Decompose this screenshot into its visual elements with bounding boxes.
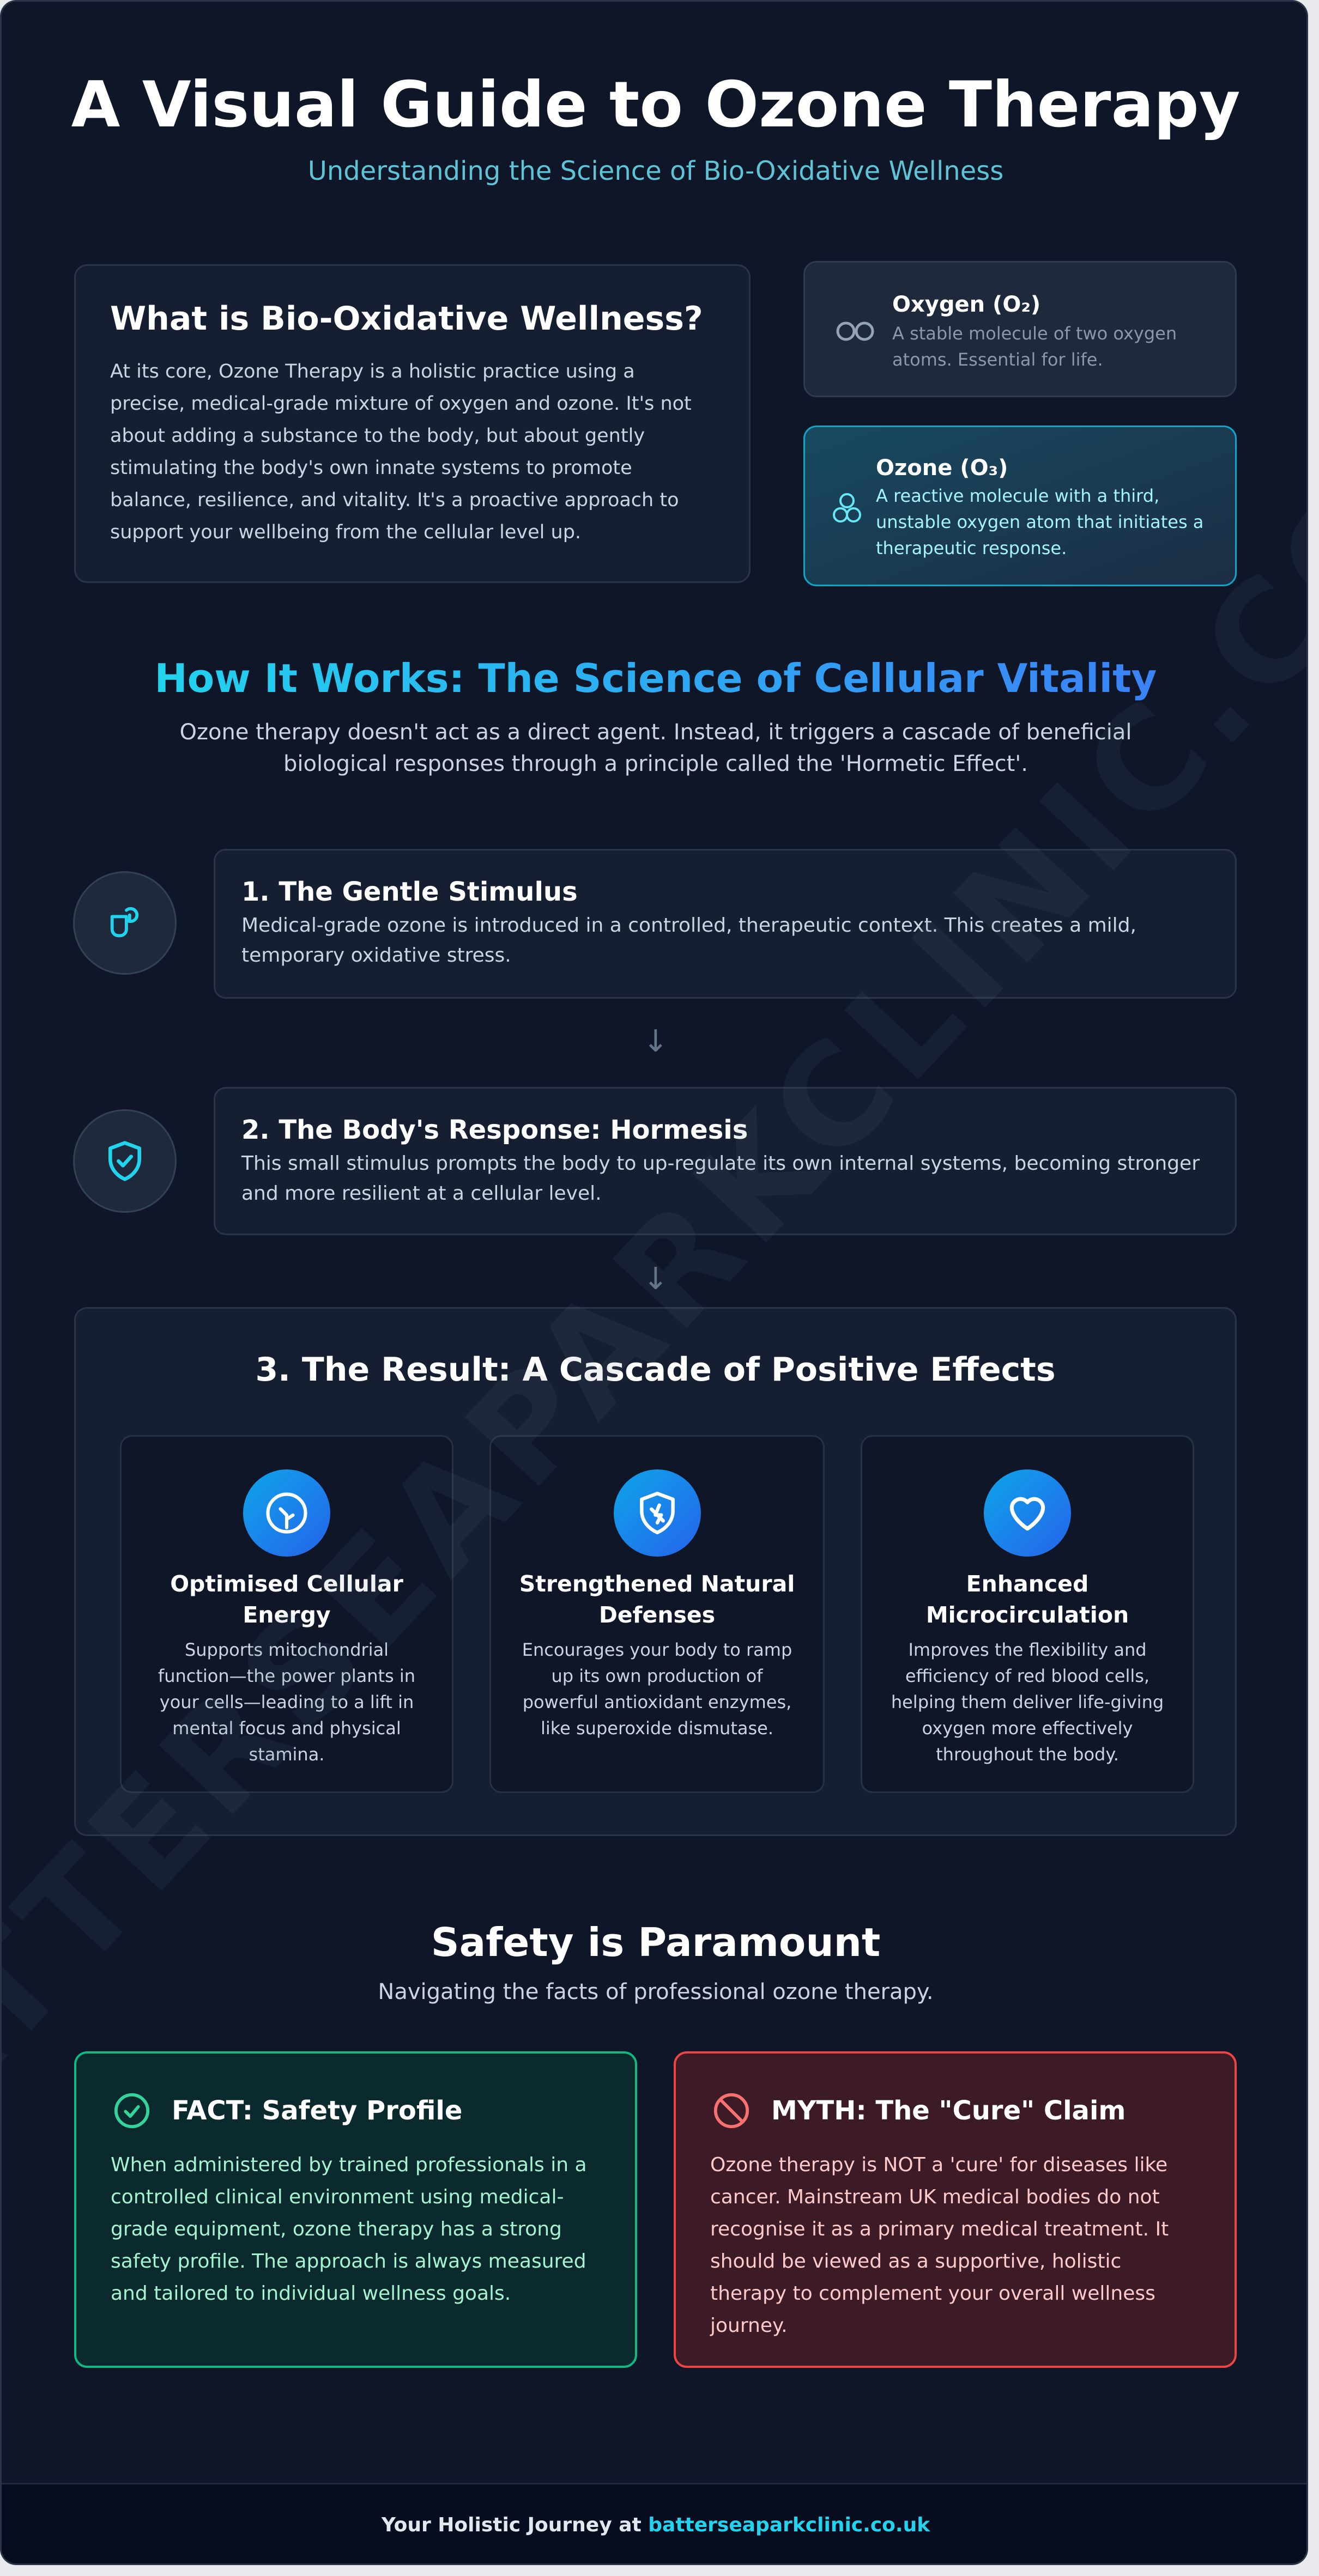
card: cellular energy: Supports mitochondrial function—the power plants in your cells—leading to a lift in mental focus and physical stamina. bbox=[158, 1639, 415, 1765]
icon: shield bbox=[614, 1469, 701, 1557]
myth title: MYTH: The "Cure" Claim bbox=[771, 2095, 1126, 2126]
panel heading: What is Bio-Oxidative Wellness? bbox=[110, 300, 703, 338]
icon: no bbox=[714, 2093, 749, 2128]
step 2 card bbox=[214, 1087, 1237, 1235]
icon: ozone molecule bbox=[833, 493, 861, 523]
heading: safety: Safety is Paramount bbox=[431, 1919, 880, 1965]
card: natural defenses: Encourages your body to ramp up its own production of powerful antioxidant enzymes, like superoxide dismutase. bbox=[522, 1639, 792, 1739]
panel: what is bio-oxidative wellness bbox=[74, 264, 751, 583]
step 2 card: This small stimulus prompts the body to up-regulate its own internal systems, becoming stronger and more resilient at a cellular level. bbox=[241, 1152, 1200, 1205]
heading: how it works: How It Works: The Science of Cellular Vitality bbox=[155, 655, 1157, 701]
title: A Visual Guide to Ozone Therapy bbox=[71, 68, 1240, 142]
how it works intro: Ozone therapy doesn't act as a direct agent. Instead, it triggers a cascade of beneficial biological responses through a principle called the 'Hormetic Effect'. bbox=[179, 720, 1132, 776]
card: cellular energy: Optimised Cellular Energy bbox=[170, 1571, 403, 1628]
panel body text: At its core, Ozone Therapy is a holistic practice using a precise, medical-grade mixture of oxygen and ozone. It's not about adding a substance to the body, but about gently stimulating the body's own innate systems to promote balance, resilience, and vitality. It's a proactive approach to support your wellbeing from the cellular level up. bbox=[110, 361, 692, 543]
oxygen description: A stable molecule of two oxygen atoms. Essential for life. bbox=[892, 323, 1177, 370]
card: natural defenses: Strengthened Natural Defenses bbox=[519, 1571, 795, 1628]
oxygen title: Oxygen (O₂) bbox=[892, 292, 1040, 317]
arrow: step 2 to 3: ↓ bbox=[643, 1261, 668, 1297]
panel: step 3 result bbox=[74, 1307, 1237, 1836]
panel: fact bbox=[74, 2051, 637, 2368]
icon: check bbox=[114, 2093, 149, 2128]
card: cellular energy bbox=[120, 1435, 453, 1793]
subtitle: Understanding the Science of Bio-Oxidative Wellness bbox=[308, 156, 1003, 186]
ozone title: Ozone (O₃) bbox=[876, 455, 1008, 481]
panel: myth bbox=[674, 2051, 1237, 2368]
fact body: When administered by trained professionals in a controlled clinical environment using medical-grade equipment, ozone therapy has a strong safety profile. The approach is always measured and tailored to individual wellness goals. bbox=[111, 2154, 587, 2305]
card: microcirculation: Improves the flexibility and efficiency of red blood cells, helping them deliver life-giving oxygen more effectively throughout the body. bbox=[891, 1639, 1164, 1765]
step 2 card: 2. The Body's Response: Hormesis bbox=[241, 1115, 748, 1145]
card: microcirculation: Enhanced Microcirculation bbox=[926, 1571, 1129, 1628]
card: oxygen bbox=[803, 261, 1237, 397]
ozone description: A reactive molecule with a third, unstable oxygen atom that initiates a therapeutic response. bbox=[876, 485, 1203, 558]
footer: Your Holistic Journey at batterseaparkclinic.co.uk bbox=[382, 2514, 930, 2536]
footer bbox=[2, 2483, 1310, 2570]
result heading: 3. The Result: A Cascade of Positive Effects bbox=[255, 1351, 1056, 1389]
step 1 card: 1. The Gentle Stimulus bbox=[241, 877, 578, 907]
icon: step 1 stimulus bbox=[73, 871, 177, 975]
myth body: Ozone therapy is NOT a 'cure' for diseases like cancer. Mainstream UK medical bodies do not recognise it as a primary medical treatment. It should be viewed as a supportive, holistic therapy to complement your overall wellness journey. bbox=[710, 2154, 1169, 2337]
card: microcirculation bbox=[861, 1435, 1194, 1793]
step 1 card bbox=[214, 849, 1237, 999]
card: natural defenses bbox=[489, 1435, 825, 1793]
arrow: step 1 to 2: ↓ bbox=[643, 1024, 668, 1059]
safety subtitle: Navigating the facts of professional ozone therapy. bbox=[378, 1979, 934, 2004]
fact title: FACT: Safety Profile bbox=[172, 2095, 462, 2126]
icon: oxygen molecule bbox=[836, 321, 874, 341]
icon: step 2 shield bbox=[73, 1109, 177, 1213]
card: ozone bbox=[803, 426, 1237, 586]
step 1 card: Medical-grade ozone is introduced in a controlled, therapeutic context. This creates a mild, temporary oxidative stress. bbox=[241, 914, 1136, 967]
icon: energy bbox=[243, 1469, 330, 1557]
icon: heart bbox=[984, 1469, 1071, 1557]
